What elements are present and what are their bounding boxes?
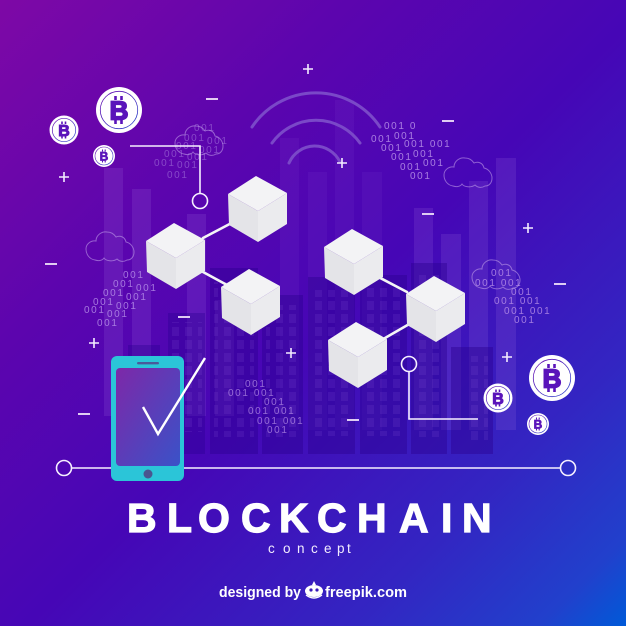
binary code: lower centre: 001	[264, 397, 286, 408]
icon: bitcoin coin large right: B	[543, 364, 561, 394]
icon: bitcoin coin large right	[529, 355, 575, 401]
binary code: lower left: 001	[84, 305, 106, 316]
binary code: lower centre: 001 001	[228, 388, 275, 399]
binary code: top left: 001	[176, 141, 198, 152]
block cube 4	[324, 229, 383, 295]
binary code: lower centre: 001 001	[257, 416, 304, 427]
binary code: top right: 001	[381, 143, 402, 154]
icon: bitcoin coin small right	[527, 413, 549, 435]
minus signs	[45, 99, 566, 420]
binary code: right	[475, 268, 551, 326]
credit line	[219, 581, 407, 601]
connector callout top	[130, 146, 208, 208]
binary code: lower left	[84, 270, 158, 329]
binary code: top right: 001 0	[384, 121, 417, 132]
icon: bitcoin coin small right: B	[534, 417, 543, 431]
binary code: lower centre: 001	[245, 379, 266, 390]
binary code: right: 001 001	[504, 306, 551, 317]
block cube 5	[406, 276, 465, 342]
binary code: top left: 001	[199, 145, 220, 156]
binary code: lower left: 001	[126, 292, 148, 303]
wifi signal arcs	[252, 93, 380, 163]
binary code: lower centre: 001	[267, 425, 288, 436]
binary code: top right: 001	[423, 158, 444, 169]
binary code: top right	[371, 121, 451, 182]
binary code: lower left: 001	[103, 288, 124, 299]
title: BLOCKCHAIN	[127, 495, 492, 541]
binary code: right: 001	[511, 287, 532, 298]
binary code: top left	[154, 123, 228, 181]
binary code: top right: 001	[394, 131, 416, 142]
binary code: right: 001 001	[494, 296, 541, 307]
timeline line with end circles	[56, 460, 576, 476]
binary code: top right: 001	[413, 149, 434, 160]
binary code: top right: 001	[400, 162, 422, 173]
skyline: light bars	[104, 100, 516, 430]
binary code: top right: 001	[410, 171, 432, 182]
icon: smartphone with check mark	[111, 356, 205, 481]
binary code: top left: 001	[177, 160, 198, 171]
binary code: top left: 001	[194, 123, 216, 134]
block cube 3	[221, 269, 280, 335]
binary code: top left: 001	[154, 158, 176, 169]
clouds	[86, 126, 520, 289]
icon: bitcoin coin medium top: B	[58, 123, 70, 140]
binary code: lower left: 001	[116, 301, 138, 312]
binary code: top left: 001	[187, 152, 208, 163]
binary code: lower left: 001	[136, 283, 158, 294]
binary code: lower centre	[228, 379, 304, 436]
binary code: right: 001 001	[475, 278, 522, 289]
icon: bitcoin coin small top: B	[100, 149, 109, 163]
binary code: right: 001	[514, 315, 536, 326]
icon: bitcoin coin medium top	[50, 116, 78, 144]
binary code: top left: 001	[167, 170, 188, 181]
block links	[192, 217, 418, 338]
block cube 6	[328, 322, 387, 388]
binary code: top right: 001	[371, 134, 392, 145]
binary code: top right: 001	[391, 152, 412, 163]
skyline: dark buildings with windows	[128, 263, 493, 454]
icon: bitcoin coin large top: B	[110, 96, 128, 126]
plus signs	[59, 64, 533, 362]
binary code: right: 001	[491, 268, 512, 279]
block cube 2	[146, 223, 205, 289]
binary code: lower left: 001	[123, 270, 144, 281]
binary code: top left: 001	[184, 133, 206, 144]
subtitle: concept	[268, 541, 351, 556]
binary code: top left: 001	[207, 136, 228, 147]
binary code: lower left: 001	[107, 309, 128, 320]
binary code: top left: 001	[164, 149, 186, 160]
block cube 1	[228, 176, 287, 242]
credit line: freepik.com	[325, 585, 407, 601]
icon: bitcoin coin medium right	[484, 384, 512, 412]
binary code: lower left: 001	[93, 297, 114, 308]
binary code: top right: 001 001	[404, 139, 451, 150]
icon: bitcoin coin small top	[93, 145, 115, 167]
credit line: designed by	[219, 585, 301, 601]
binary code: lower left: 001	[113, 279, 134, 290]
icon: bitcoin coin medium right: B	[492, 391, 504, 408]
icon: bitcoin coin large top	[96, 87, 142, 133]
binary code: lower left: 001	[97, 318, 118, 329]
icon: freepik mascot	[305, 581, 323, 598]
binary code: lower centre: 001 001	[248, 406, 295, 417]
connector callout bottom	[402, 356, 478, 419]
